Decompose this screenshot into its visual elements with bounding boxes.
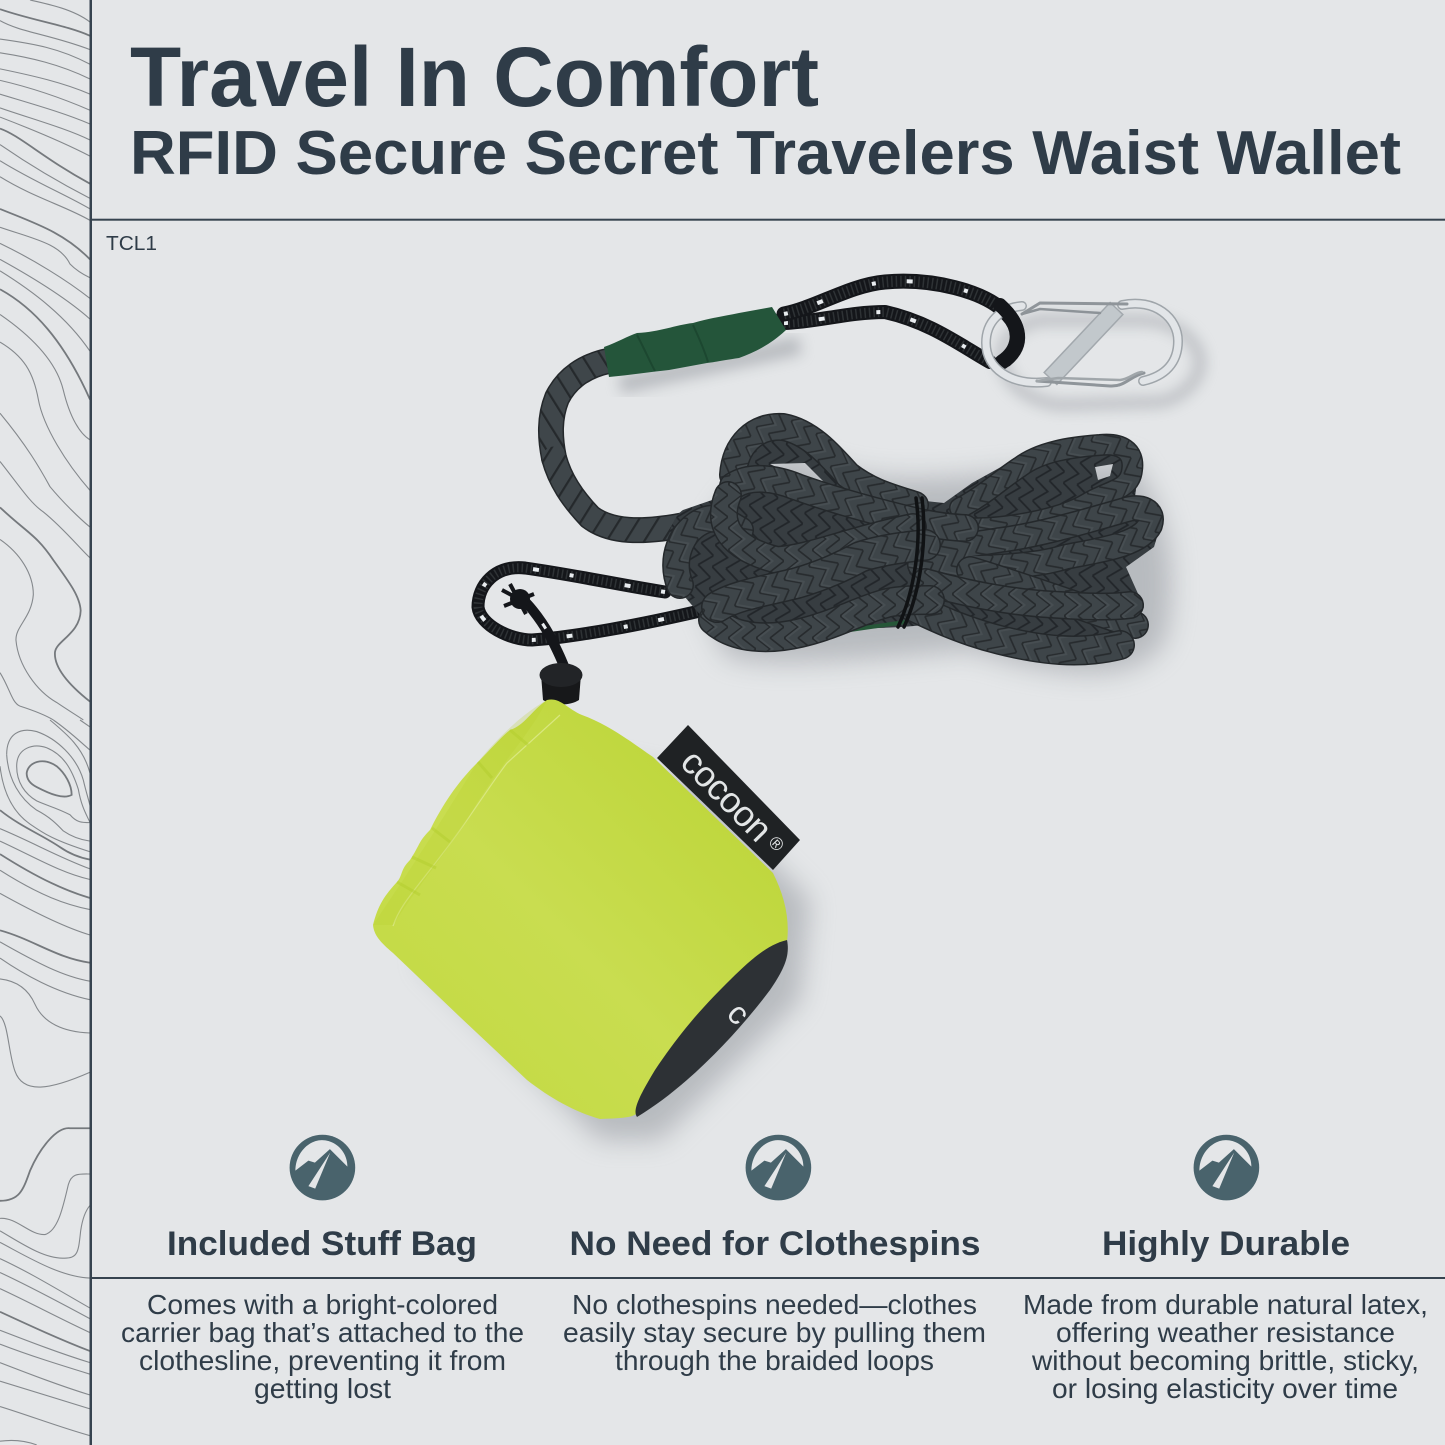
text block: clothespins description: easily stay secure by pulling them (563, 1317, 986, 1348)
heading: included stuff bag: Included Stuff Bag (167, 1225, 477, 1263)
feature 3 (1023, 1135, 1428, 1404)
coiled braided bundle (665, 423, 1163, 660)
product code: TCL1 (106, 233, 157, 255)
brand label: ® (764, 832, 788, 856)
title: Travel In Comfort (130, 30, 819, 124)
subtitle: RFID Secure Secret Travelers Waist Wallet (130, 119, 1401, 188)
text block: clothespins description: No clothespins needed—clothes (572, 1289, 977, 1320)
strands (676, 427, 1151, 650)
bundle silhouette (665, 423, 1163, 660)
text block: durability description: without becoming brittle, sticky, (1031, 1345, 1419, 1376)
text block: stuff bag description: Comes with a bright-colored (147, 1289, 498, 1320)
text block: stuff bag description: clothesline, preventing it from (139, 1345, 506, 1376)
braided rope (551, 361, 690, 530)
feature 2 (563, 1135, 986, 1376)
bag inner dark pouch: c (720, 995, 757, 1032)
carabiner (986, 303, 1178, 386)
bag inner dark pouch (636, 940, 788, 1117)
text block: durability description: Made from durable natural latex, (1023, 1289, 1428, 1320)
brand label (657, 725, 800, 870)
icon: mountain badge 3 (1194, 1135, 1259, 1200)
cord knot and toggle lead (502, 584, 566, 672)
text block: durability description: offering weather resistance (1056, 1317, 1395, 1348)
brand label: cocoon (673, 741, 781, 850)
heading: no need for clothespins: No Need for Clothespins (570, 1225, 980, 1263)
topographic contour side panel (0, 0, 90, 1445)
text block: stuff bag description: getting lost (254, 1373, 391, 1404)
clothesline: black top loop (784, 281, 1017, 362)
elastic band (898, 498, 924, 627)
bottom black cord loop (478, 568, 704, 640)
black cord passing through carabiner (1000, 305, 1018, 360)
feature 1 (121, 1135, 524, 1404)
icon: mountain badge 2 (746, 1135, 811, 1200)
text block: stuff bag description (121, 1289, 524, 1404)
stuff bag (373, 699, 788, 1119)
text block: clothespins description (563, 1289, 986, 1376)
text block: stuff bag description: carrier bag that’s attached to the (121, 1317, 524, 1348)
green sleeve (604, 307, 786, 377)
drawstring toggle (540, 663, 582, 704)
text block: clothespins description: through the braided loops (615, 1345, 934, 1376)
heading: highly durable: Highly Durable (1102, 1225, 1350, 1263)
text block: durability description (1023, 1289, 1428, 1404)
icon: mountain badge 1 (290, 1135, 355, 1200)
product shadows (420, 320, 1200, 1140)
text block: durability description: or losing elasticity over time (1052, 1373, 1398, 1404)
